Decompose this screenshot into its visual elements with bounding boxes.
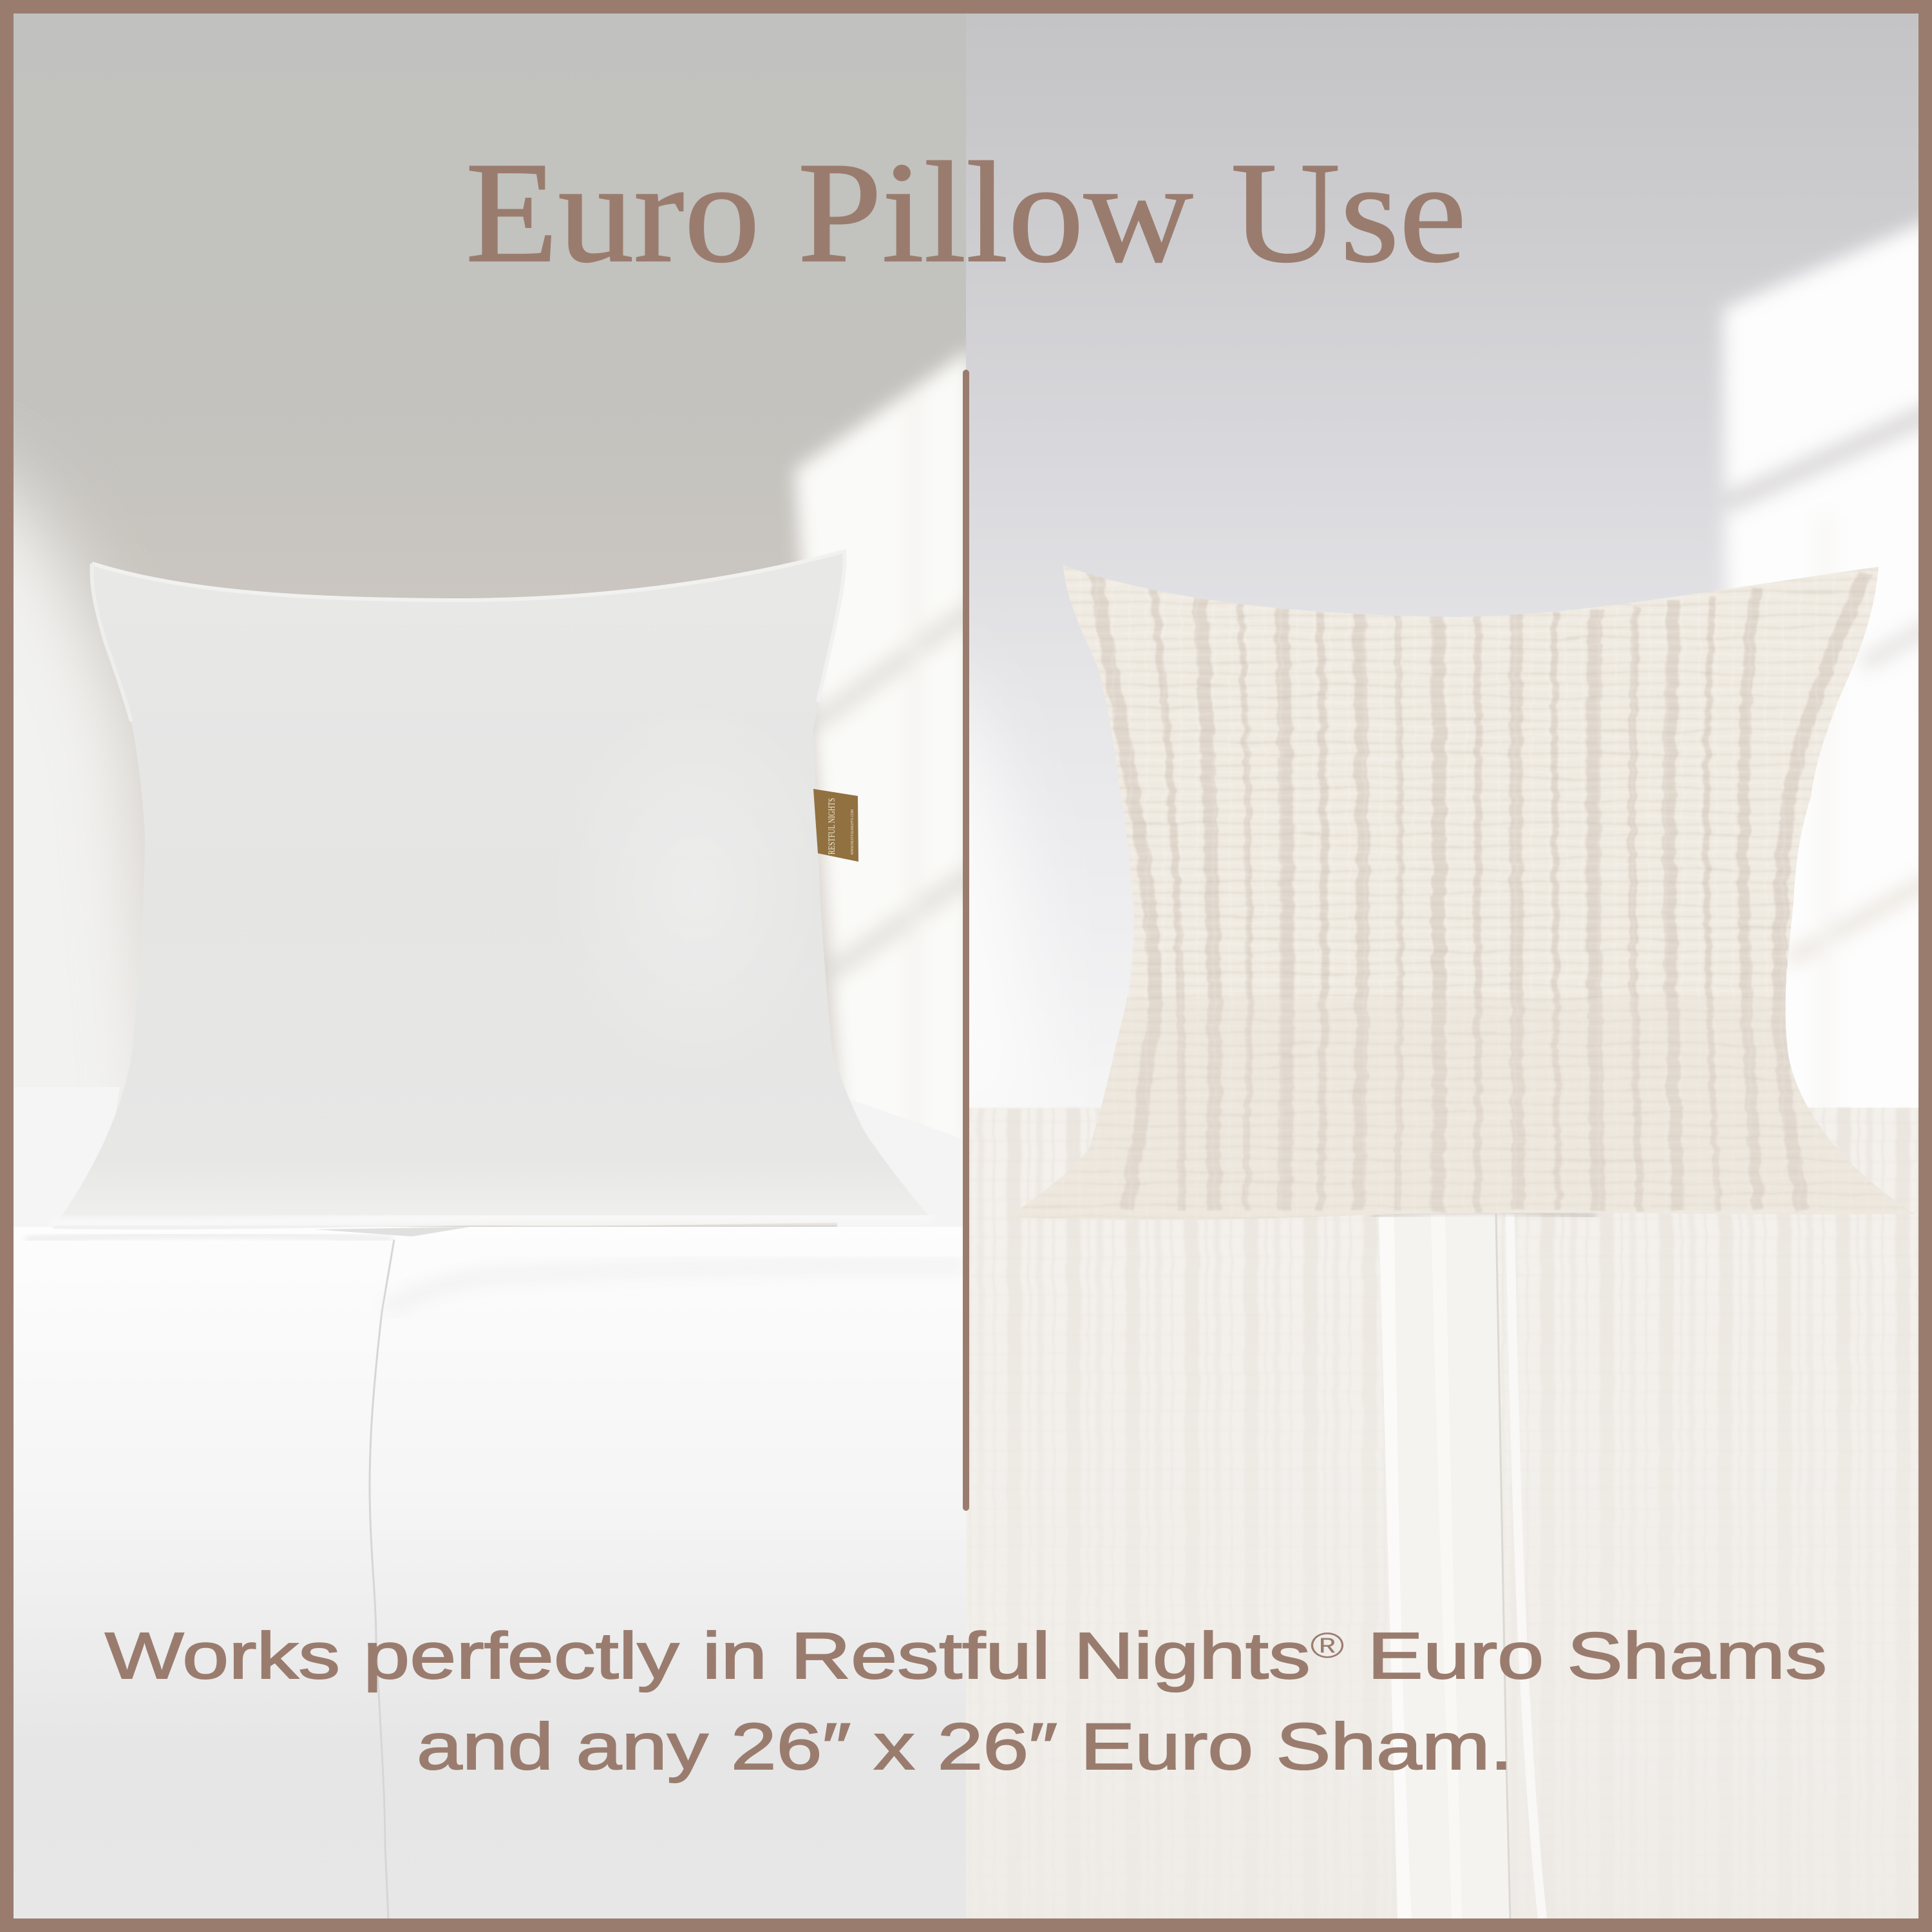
panel: left photo, euro pillow insert [0, 14, 972, 1918]
left wall [14, 14, 966, 1237]
left wall light falloff [14, 455, 145, 1113]
panel: right photo, euro sham [889, 14, 1932, 1926]
duvet comforter [14, 1087, 966, 1918]
caption line 1: Euro Shams [1344, 1619, 1827, 1692]
caption line 2: and any 26″ x 26″ Euro Sham. [417, 1710, 1513, 1783]
caption line 1: Works perfectly in Restful Nights [105, 1619, 1053, 1692]
caption line 1: ® [1311, 1625, 1344, 1665]
pillow tag: Restful Nights: RESTFUL NIGHTS [827, 798, 837, 855]
caption text [105, 1619, 1827, 1783]
center divider [963, 370, 969, 1511]
striped bedspread [960, 1108, 1925, 1926]
title: Euro Pillow Use [466, 133, 1466, 292]
pillow tag: Restful Nights [813, 789, 858, 862]
right wall light falloff [969, 717, 1014, 1054]
window light: right panel [1723, 219, 1932, 1140]
window light: left panel [795, 348, 972, 1159]
sham pillow [1005, 560, 1919, 1224]
euro pillow insert [52, 551, 934, 1236]
pillow tag: Restful Nights: WWW.RESTFULNIGHTS.COM [851, 810, 855, 855]
right wall [966, 14, 1918, 1141]
